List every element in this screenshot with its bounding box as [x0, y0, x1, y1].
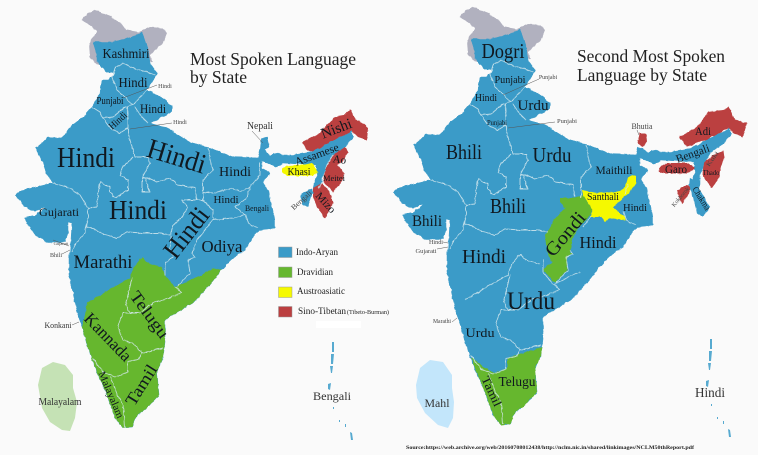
state labels: Telugu — [126, 287, 173, 343]
state labels — [412, 39, 725, 410]
region: Andaman and Nicobar islands — [706, 339, 731, 437]
state borders — [53, 63, 333, 427]
state labels: Nishi — [319, 116, 354, 142]
state labels: Malayalam — [95, 370, 125, 420]
title: Second Most Spoken — [577, 46, 725, 66]
state labels: Hindi — [462, 246, 506, 268]
state labels: Hindi — [214, 194, 238, 206]
state labels: Bengali — [313, 389, 352, 403]
state labels: Hindi — [623, 202, 647, 214]
state labels: Hindi — [695, 386, 725, 401]
state labels: Hindi — [219, 165, 251, 180]
legend item: Dravidian: Dravidian — [297, 267, 333, 277]
region: Sino-Tibetan Bhutia — [637, 133, 647, 147]
legend item: Sino-Tibetan: Sino-Tibetan — [298, 307, 346, 317]
region: main landmass Indo-Aryan — [393, 29, 731, 425]
region: Austroasiatic Santhali — [582, 175, 636, 222]
state labels: Hindi — [580, 233, 617, 252]
state labels: Hindi — [173, 120, 187, 126]
state labels: Santhali — [587, 192, 619, 203]
state labels: Hindi — [475, 93, 497, 104]
state labels: Kuki — [706, 150, 721, 168]
state labels: Malayalam — [38, 397, 82, 408]
state labels: Urdu — [532, 143, 572, 167]
state labels: Meitei — [323, 174, 346, 183]
map: most spoken language by state — [15, 10, 368, 440]
state labels: Garo — [665, 162, 687, 176]
state labels: Tamil — [479, 374, 505, 409]
region: Andaman and Nicobar islands — [328, 342, 353, 440]
state labels: Telugu — [498, 375, 536, 390]
state labels: Urdu — [507, 288, 555, 315]
state labels: Khasi — [288, 167, 311, 178]
legend item: Sino-Tibetan: (Tibeto-Burman) — [347, 309, 389, 316]
region: Sino-Tibetan Adi — [679, 107, 747, 147]
state labels: Punjabi — [494, 74, 526, 86]
region: Bengali Tripura — [300, 188, 312, 207]
region: Sino-Tibetan Ao and Meitei — [323, 147, 348, 192]
state labels: Bhili — [412, 213, 443, 230]
region: Sino-Tibetan Mizo — [313, 183, 333, 219]
state labels: Nepali — [247, 121, 273, 132]
state borders — [431, 60, 636, 424]
region: Sino-Tibetan Garo — [659, 163, 695, 174]
state labels: Gujarati — [54, 241, 69, 246]
leader lines — [53, 85, 263, 325]
state labels: Thado — [702, 169, 720, 177]
state labels: Konkani — [44, 321, 72, 330]
state labels: Kannada — [80, 309, 136, 366]
state labels: Bengali — [289, 188, 314, 212]
region: Chakma — [689, 178, 710, 217]
state labels: Tamil — [121, 361, 161, 409]
region: Austroasiatic Khasi — [282, 163, 318, 176]
region: Dravidian Gondi — [543, 195, 593, 283]
state labels: Bengali — [674, 143, 711, 166]
state labels: Dogri — [482, 39, 525, 63]
state labels: Gujarati — [39, 205, 80, 219]
state labels: Gujarati — [416, 249, 437, 255]
region: Sino-Tibetan Kokborok — [677, 185, 691, 204]
region: Dravidian south — [82, 257, 222, 428]
state labels: Mahl — [424, 396, 450, 410]
region: disputed territory — [459, 7, 545, 62]
state labels: Assamese — [293, 142, 341, 169]
state labels: Hindi — [140, 101, 166, 116]
state labels: Hindi — [57, 143, 115, 174]
region: Sino-Tibetan Nishi — [302, 110, 368, 152]
state labels: Gondi — [541, 208, 591, 261]
state labels: Chakma — [690, 185, 713, 212]
state labels: Hindi — [157, 201, 215, 264]
title — [190, 49, 356, 87]
state labels: Punjabi — [96, 96, 124, 107]
state labels: Hindi — [118, 76, 148, 91]
title: Language by State — [577, 65, 707, 85]
state labels: Punjabi — [487, 118, 507, 127]
state labels: Maithili — [596, 163, 633, 177]
state labels: Bhili — [490, 194, 526, 218]
title: by State — [190, 67, 247, 87]
state labels: Punjabi — [557, 118, 577, 125]
region: main landmass Indo-Aryan — [15, 32, 353, 428]
state labels: Odiya — [202, 237, 243, 256]
map: second most spoken language by state — [393, 7, 747, 437]
legend item: Sino-Tibetan — [278, 306, 389, 317]
state labels: Urdu — [518, 98, 549, 114]
state labels: Ao — [332, 153, 347, 167]
state labels: Bhutia — [632, 122, 653, 131]
source note: Source:https://web.archive.org/web/20160708012438/http://nclm.nic.in/shared/linkimages/NCLM50thReport.pdf — [406, 445, 694, 451]
legend — [278, 247, 389, 317]
state labels: Hindi — [429, 240, 443, 246]
region: Sino-Tibetan Kuki and Thado — [702, 151, 724, 188]
state labels: Marathi — [74, 252, 132, 273]
state labels: Hindi — [109, 195, 167, 225]
region: disputed territory — [81, 10, 167, 65]
state labels: Hindi — [107, 110, 130, 132]
state labels: Adi — [695, 124, 712, 138]
state labels: Hindi — [158, 84, 172, 90]
leader lines — [437, 79, 639, 322]
region: Lakshadweep Malayalam — [38, 362, 77, 431]
region: Lakshadweep Mahl — [416, 360, 454, 428]
legend item: Indo-Aryan: Indo-Aryan — [296, 247, 338, 257]
state labels: Bhili — [446, 140, 482, 164]
title: Most Spoken Language — [190, 49, 356, 69]
title — [577, 46, 725, 85]
region: Dravidian Telugu and Tamil — [471, 347, 543, 425]
state labels: Kashmiri — [102, 47, 150, 62]
state labels: Kokborok — [671, 186, 691, 208]
state labels: Bhili — [50, 253, 62, 259]
state labels: Punjabi — [539, 75, 557, 81]
state labels — [38, 47, 354, 420]
state labels: Marathi — [433, 319, 451, 325]
legend item: Austroasiatic: Austroasiatic — [297, 286, 345, 296]
state labels: Bengali — [245, 204, 270, 213]
state labels: Urdu — [466, 325, 495, 340]
state labels: Mizo — [313, 190, 338, 216]
state labels: Hindi — [143, 133, 210, 181]
